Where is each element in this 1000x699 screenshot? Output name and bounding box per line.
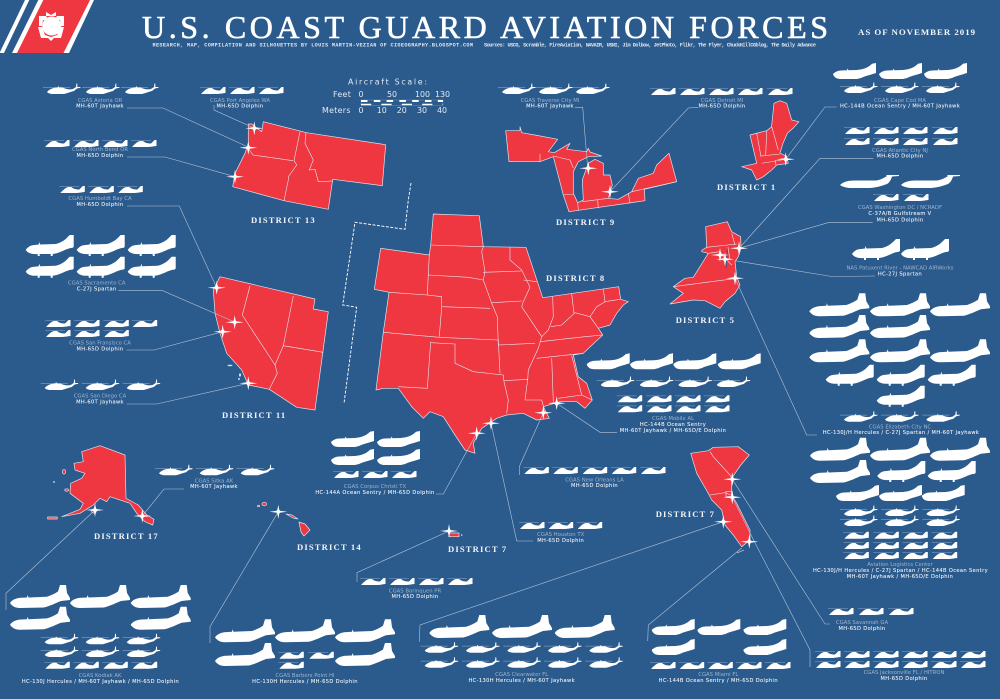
leader line: Cape Cod	[786, 107, 837, 159]
panel: Aviation Logistics Center: Aviation Logistics Center	[867, 562, 934, 568]
panel: CGAS San Francisco	[45, 320, 157, 352]
panel: CGAS Miami: CGAS Miami FL	[698, 672, 738, 678]
panel: CGAS Clearwater: CGAS Clearwater FL	[495, 672, 548, 678]
leader line: Sitka	[142, 489, 184, 516]
panel: CGAS Humboldt Bay: MH-65D Dolphin	[77, 202, 123, 208]
leader line: New Orleans	[519, 413, 543, 475]
panel: CGAS Mobile: HC-144B Ocean Sentry	[640, 422, 706, 428]
leader line: Patuxent River	[735, 261, 875, 276]
map: district 7 florida georgia carolina	[691, 447, 750, 553]
panel: CGAS New Orleans: MH-65D Dolphin	[571, 483, 618, 489]
panel: CGAS Washington DC: C-37A/B Gulfstream V	[868, 211, 932, 217]
leader line: Sacramento	[118, 291, 235, 322]
label: district 8: DISTRICT 8	[546, 273, 605, 283]
panel: CGAS Washington DC: CGAS Washington DC / NCRADF	[858, 205, 942, 211]
panel: CGAS Miami: HC-144B Ocean Sentry / MH-65D Dolphin	[659, 678, 778, 684]
aircraft scale: 130	[435, 90, 450, 99]
panel: CGAS North Bend: CGAS North Bend OR	[72, 147, 128, 153]
panel: CGAS Sacramento	[26, 235, 176, 292]
label: district 5: DISTRICT 5	[676, 315, 735, 325]
map: district 5	[670, 222, 741, 308]
panel: CGAS Jacksonville	[815, 651, 986, 682]
aircraft scale: 50	[387, 90, 397, 99]
label: district 14: DISTRICT 14	[297, 542, 362, 552]
panel: CGAS Clearwater	[421, 615, 623, 684]
panel: CGAS Savannah: CGAS Savannah GA	[836, 620, 888, 626]
leader line: Mobile	[557, 403, 617, 432]
leader line: Washington DC	[739, 222, 873, 248]
panel: CGAS New Orleans: CGAS New Orleans LA	[565, 478, 624, 484]
panel: NAS Patuxent River	[846, 239, 954, 278]
leader line: Kodiak	[6, 510, 95, 610]
panel: CGAS Sitka: MH-60T Jayhawk	[190, 484, 238, 490]
panel: CGAS Humboldt Bay: CGAS Humboldt Bay CA	[68, 196, 132, 202]
aircraft scale: Aircraft Scale:	[348, 78, 429, 86]
map: puerto rico	[449, 533, 463, 537]
leader line: Port Angeles	[214, 105, 254, 128]
label: district 7 puerto rico: DISTRICT 7	[448, 544, 507, 554]
panel: CGAS San Diego: CGAS San Diego CA	[74, 394, 127, 400]
panel: CGAS Sacramento: CGAS Sacramento CA	[68, 280, 126, 286]
leader line: Atlantic City	[739, 158, 873, 248]
leader line: Jacksonville	[732, 497, 810, 667]
panel: CGAS Jacksonville: CGAS Jacksonville FL / HITRON	[864, 670, 944, 676]
panel: CGAS Corpus Christi: HC-144A Ocean Sentry / MH-65D Dolphin	[315, 490, 435, 496]
panel: CGAS Cape Cod	[833, 63, 967, 110]
panel: CGAS Cape Cod: HC-144B Ocean Sentry / MH-60T Jayhawk	[840, 104, 960, 110]
panel: CGAS Borinquen: MH-65D Dolphin	[392, 594, 438, 600]
title: U.S. COAST GUARD AVIATION FORCES	[142, 9, 828, 45]
panel: CGAS Borinquen: CGAS Borinquen PR	[389, 589, 441, 595]
map: district 8	[374, 214, 628, 453]
label: district 17: DISTRICT 17	[94, 531, 159, 541]
leader line: Humboldt Bay	[127, 206, 217, 288]
panel: CGAS Barbers Point: CGAS Barbers Point HI	[275, 673, 335, 679]
panel: CGAS Traverse City: CGAS Traverse City MI	[521, 98, 580, 104]
credits: RESEARCH, MAP, COMPILATION AND SILHOUETTES BY LOUIS MARTIN-VEZIAN OF CIGEOGRAPHY.BLOGSPOT.COM	[152, 42, 473, 48]
leader line: Astoria	[127, 108, 248, 147]
panel: CGAS San Diego	[41, 380, 160, 406]
panel: CGAS Port Angeles: MH-65D Dolphin	[217, 104, 263, 110]
panel: CGAS Clearwater: HC-130H Hercules / MH-60T Jayhawk	[468, 678, 575, 684]
boundary: dashed maritime line	[343, 183, 411, 403]
panel: CGAS North Bend	[44, 140, 156, 159]
map: district 1	[742, 101, 799, 180]
panel: CGAS Detroit: MH-65D Dolphin	[699, 104, 745, 110]
leader line: Clearwater	[419, 522, 723, 642]
leader line: Miami	[648, 548, 742, 641]
map: district 9	[506, 127, 677, 212]
aircraft scale: 40	[437, 106, 447, 115]
label: district 7 mainland: DISTRICT 7	[656, 509, 715, 519]
panel: CGAS Astoria: CGAS Astoria OR	[78, 98, 123, 104]
map: district 17 alaska	[48, 446, 154, 525]
panel: CGAS Borinquen	[360, 578, 472, 600]
panel: CGAS Jacksonville: MH-65D Dolphin	[881, 676, 927, 682]
panel: CGAS North Bend: MH-65D Dolphin	[77, 153, 123, 159]
label: district 11: DISTRICT 11	[222, 410, 286, 420]
coast guard racing stripe logo	[0, 0, 94, 53]
leader line: San Francisco	[127, 332, 223, 350]
panel: CGAS Savannah: MH-65D Dolphin	[839, 626, 885, 632]
aircraft scale	[322, 78, 450, 115]
label: district 1: DISTRICT 1	[717, 182, 776, 192]
panel: CGAS Washington DC: MH-65D Dolphin	[877, 218, 923, 224]
panel: CGAS Elizabeth City: HC-130J/H Hercules / C-27J Spartan / MH-60T Jayhawk	[823, 430, 979, 436]
panel: CGAS Astoria	[43, 84, 158, 110]
panel: CGAS Atlantic City	[844, 127, 958, 160]
panel: CGAS Atlantic City: CGAS Atlantic City NJ	[872, 148, 928, 154]
panel: CGAS New Orleans	[523, 467, 666, 489]
leader line: Borinquen	[357, 531, 449, 582]
map: district 13	[233, 122, 386, 209]
panel: CGAS Mobile: CGAS Mobile AL	[652, 416, 694, 422]
label: district 13: DISTRICT 13	[251, 215, 316, 225]
panel: CGAS Sacramento: C-27J Spartan	[77, 286, 117, 292]
leader line: Savannah	[732, 479, 830, 624]
panel: CGAS Humboldt Bay	[59, 186, 143, 208]
panel: CGAS Kodiak	[10, 585, 191, 685]
panel: Aviation Logistics Center	[810, 438, 990, 580]
panel: CGAS Port Angeles	[200, 87, 284, 110]
panel: CGAS Cape Cod: CGAS Cape Cod MA	[874, 98, 926, 104]
panel: CGAS Elizabeth City	[809, 293, 990, 436]
leader line: Barbers Point	[210, 512, 278, 643]
date: AS OF NOVEMBER 2019	[858, 27, 976, 37]
leader line: Traverse City	[575, 107, 588, 168]
panel: CGAS Port Angeles: CGAS Port Angeles WA	[210, 98, 270, 104]
panel: CGAS Atlantic City: MH-65D Dolphin	[877, 154, 923, 160]
leader line: San Diego	[127, 383, 248, 404]
leader line: North Bend	[127, 157, 235, 177]
panel: CGAS Savannah	[828, 608, 914, 632]
panel: CGAS Miami	[650, 619, 790, 684]
leader line: Corpus Christi	[436, 433, 477, 494]
panel: CGAS Houston: MH-65D Dolphin	[537, 538, 584, 544]
panel: CGAS Sitka	[155, 465, 274, 490]
panel: CGAS Houston: CGAS Houston TX	[537, 532, 585, 538]
panel: CGAS Traverse City: MH-60T Jayhawk	[526, 104, 574, 110]
panel: CGAS Detroit	[650, 88, 792, 110]
panel: CGAS Corpus Christi: CGAS Corpus Christi TX	[344, 484, 407, 490]
panel: CGAS Corpus Christi	[315, 431, 435, 496]
panel: NAS Patuxent River: NAS Patuxent River - NAWCAD AIRWorks	[846, 266, 954, 272]
panel: CGAS Washington DC	[840, 175, 960, 224]
leader line: Detroit	[610, 107, 698, 192]
map: district 14 hawaii	[257, 502, 310, 536]
leader line: Elizabeth City	[735, 278, 817, 435]
panel: CGAS Kodiak: HC-130J Hercules / MH-60T Jayhawk / MH-65D Dolphin	[22, 679, 179, 685]
panel: NAS Patuxent River: HC-27J Spartan	[878, 272, 922, 278]
panel: CGAS Sitka: CGAS Sitka AK	[195, 478, 234, 484]
panel: CGAS Detroit: CGAS Detroit MI	[701, 98, 744, 104]
label: district 9: DISTRICT 9	[556, 217, 615, 227]
panel: CGAS Traverse City	[498, 84, 610, 110]
panel: CGAS Kodiak: CGAS Kodiak AK	[79, 673, 122, 679]
aircraft scale: Meters	[322, 106, 351, 115]
sources: Sources: USCG, Scramble, FireAviation, NAVAIR, USNI, Jim Dolbow, JetPhoto, Flikr, The Flyer, ChuckHillCGblog, The Daily Advance	[484, 42, 816, 48]
aircraft scale: 10	[377, 106, 387, 115]
panel: CGAS Mobile	[587, 353, 761, 434]
aircraft scale: 20	[397, 106, 407, 115]
panel: CGAS Mobile: MH-60T Jayhawk / MH-65D/E Dolphin	[620, 428, 726, 434]
aircraft scale: Feet	[333, 90, 351, 99]
aircraft scale: 0	[358, 90, 364, 99]
panel: CGAS Houston	[519, 522, 602, 544]
panel: CGAS San Diego: MH-60T Jayhawk	[76, 400, 124, 406]
air station markers	[86, 121, 795, 549]
map: district 11	[213, 277, 328, 410]
panel: CGAS Barbers Point	[215, 619, 395, 685]
aircraft scale: 0	[358, 106, 364, 115]
aircraft scale: 100	[415, 90, 430, 99]
leader line: Houston	[491, 423, 533, 541]
panel: CGAS San Francisco: MH-65D Dolphin	[77, 346, 123, 352]
panel: Aviation Logistics Center: HC-130J/H Hercules / C-27J Spartan / HC-144B Ocean Sentry	[813, 568, 988, 574]
panel: Aviation Logistics Center: MH-60T Jayhawk / MH-65D/E Dolphin	[847, 574, 953, 580]
panel: CGAS Barbers Point: HC-130H Hercules / MH-65D Dolphin	[252, 679, 358, 685]
panel: CGAS Astoria: MH-60T Jayhawk	[76, 104, 124, 110]
panel: CGAS Elizabeth City: CGAS Elizabeth City NC	[869, 424, 931, 430]
aircraft scale: 30	[417, 106, 427, 115]
panel: CGAS San Francisco: CGAS San Fransisco CA	[69, 340, 131, 346]
